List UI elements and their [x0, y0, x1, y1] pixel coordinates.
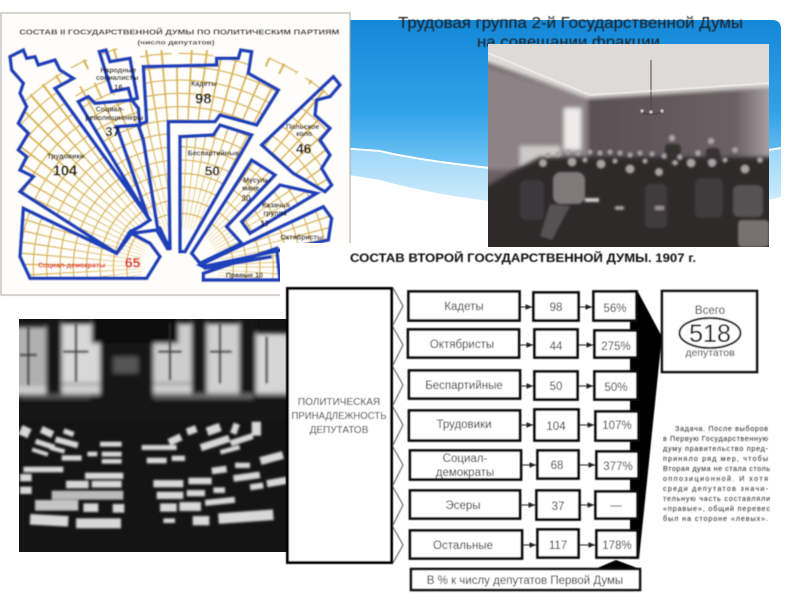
task text block: оппозиционной. И хотя [663, 474, 768, 483]
photo: Duma chamber [19, 319, 287, 552]
flow chart: Кадеты [444, 301, 484, 313]
flow chart: — [610, 500, 622, 512]
party labels: социалисты [96, 75, 139, 82]
task text block: «правые», общий перевес [663, 504, 770, 513]
footer note box [411, 569, 640, 590]
chevrons [393, 288, 403, 563]
flow chart: Социал- [443, 453, 487, 465]
flow chart: 178% [602, 540, 632, 552]
flow chart: 117 [549, 540, 567, 552]
flow chart: 107% [602, 420, 632, 432]
flow chart: Октябристы [430, 339, 494, 351]
task text block [663, 424, 770, 523]
flow chart: 377% [603, 461, 633, 473]
total deputies box: Всего [695, 305, 725, 317]
party labels: Казачья [262, 203, 290, 210]
flow chart: 68 [551, 460, 563, 472]
total deputies box [662, 291, 757, 372]
flow chart: Беспартийные [425, 380, 503, 392]
flow chart: 44 [550, 341, 563, 353]
party labels: 104 [53, 164, 78, 180]
map title: СОСТАВ II ГОСУДАРСТВЕННОЙ ДУМЫ ПО ПОЛИТИЧЕСКИМ ПАРТИЯМ [19, 27, 340, 36]
party labels: революционеры [85, 115, 143, 122]
chart title: СОСТАВ ВТОРОЙ ГОСУДАРСТВЕННОЙ ДУМЫ. 1907 г. [350, 252, 696, 265]
task text block: среди депутатов значи- [663, 484, 769, 493]
task text block: приняло ряд мер, чтобы [663, 454, 768, 463]
task text block: думу правительство пред- [663, 444, 769, 453]
deputy count boxes [534, 292, 580, 558]
flow chart: Трудовики [436, 419, 492, 431]
panel: party composition map [0, 12, 352, 296]
flow chart [288, 288, 770, 590]
total deputies box: депутатов [685, 347, 735, 359]
flow chart: 50% [604, 382, 628, 394]
task text block: был на стороне «левых». [663, 514, 768, 523]
box: political affiliation: ПОЛИТИЧЕСКАЯ [298, 397, 380, 408]
party labels: Мусуль- [243, 178, 272, 185]
flow chart: 98 [550, 302, 562, 314]
total deputies box: 518 [689, 320, 731, 348]
party labels: коло [296, 131, 312, 138]
party labels: 46 [296, 141, 312, 157]
black connector wedge [630, 290, 661, 559]
party labels: мане [242, 186, 259, 193]
party labels [38, 67, 323, 279]
slide title: Трудовая группа: на совещании фракции [477, 34, 660, 51]
party labels: Польское [286, 124, 319, 131]
box: political affiliation: ДЕПУТАТОВ [310, 425, 369, 436]
party labels: группа [263, 211, 287, 218]
party labels: Социал-демократы [38, 262, 105, 269]
party labels: 98 [195, 91, 211, 107]
party outlines [10, 50, 340, 280]
party labels: Октябристы [280, 233, 323, 241]
party name boxes [408, 292, 522, 558]
task text block: Вторая дума не стала столь [663, 464, 770, 473]
arrows [520, 305, 596, 547]
party labels: Трудовики [47, 153, 84, 160]
party labels: 16 [114, 82, 123, 91]
flow chart: демократы [436, 467, 494, 479]
desks [18, 422, 287, 528]
flow chart: 104 [546, 421, 566, 433]
flow chart: Остальные [433, 540, 493, 552]
party labels: 17 [260, 219, 270, 229]
task text block: в Первую Государственную [663, 434, 769, 443]
slide title: Трудовая группа [398, 15, 743, 51]
task text block: Задача. После выборов [675, 424, 768, 433]
map title [19, 27, 340, 46]
party labels: Кадеты [191, 81, 217, 88]
flow chart: 56% [603, 303, 627, 315]
map title: (число депутатов) [137, 39, 215, 46]
box: political affiliation: ПРИНАДЛЕЖНОСТЬ [292, 411, 387, 422]
panel: chart background [280, 243, 800, 600]
party labels: Беспартийные [188, 150, 239, 158]
slide title: Трудовая группа: Трудовая группа 2-й Государственной Думы [398, 15, 743, 32]
party labels: Народные [100, 67, 136, 74]
task text block: тельную часть составляли [663, 494, 770, 503]
seat grid [20, 48, 330, 279]
party labels: 50 [205, 164, 220, 179]
blue slide background [20, 20, 781, 210]
flow chart: Эсеры [445, 500, 481, 512]
flow chart: 37 [552, 501, 564, 513]
flow chart: 275% [601, 341, 631, 353]
party labels: 37 [105, 124, 120, 139]
percent boxes [594, 292, 638, 558]
party labels: 65 [125, 254, 141, 270]
flow chart: 50 [550, 381, 562, 393]
photo: Trudovik group meeting [488, 44, 769, 247]
party labels: Социал- [96, 107, 125, 114]
box: political affiliation [288, 288, 392, 562]
footer note box: В % к числу депутатов Первой Думы [427, 575, 623, 587]
party labels: 30 [241, 193, 251, 203]
party labels: Правые 10 [226, 272, 263, 279]
